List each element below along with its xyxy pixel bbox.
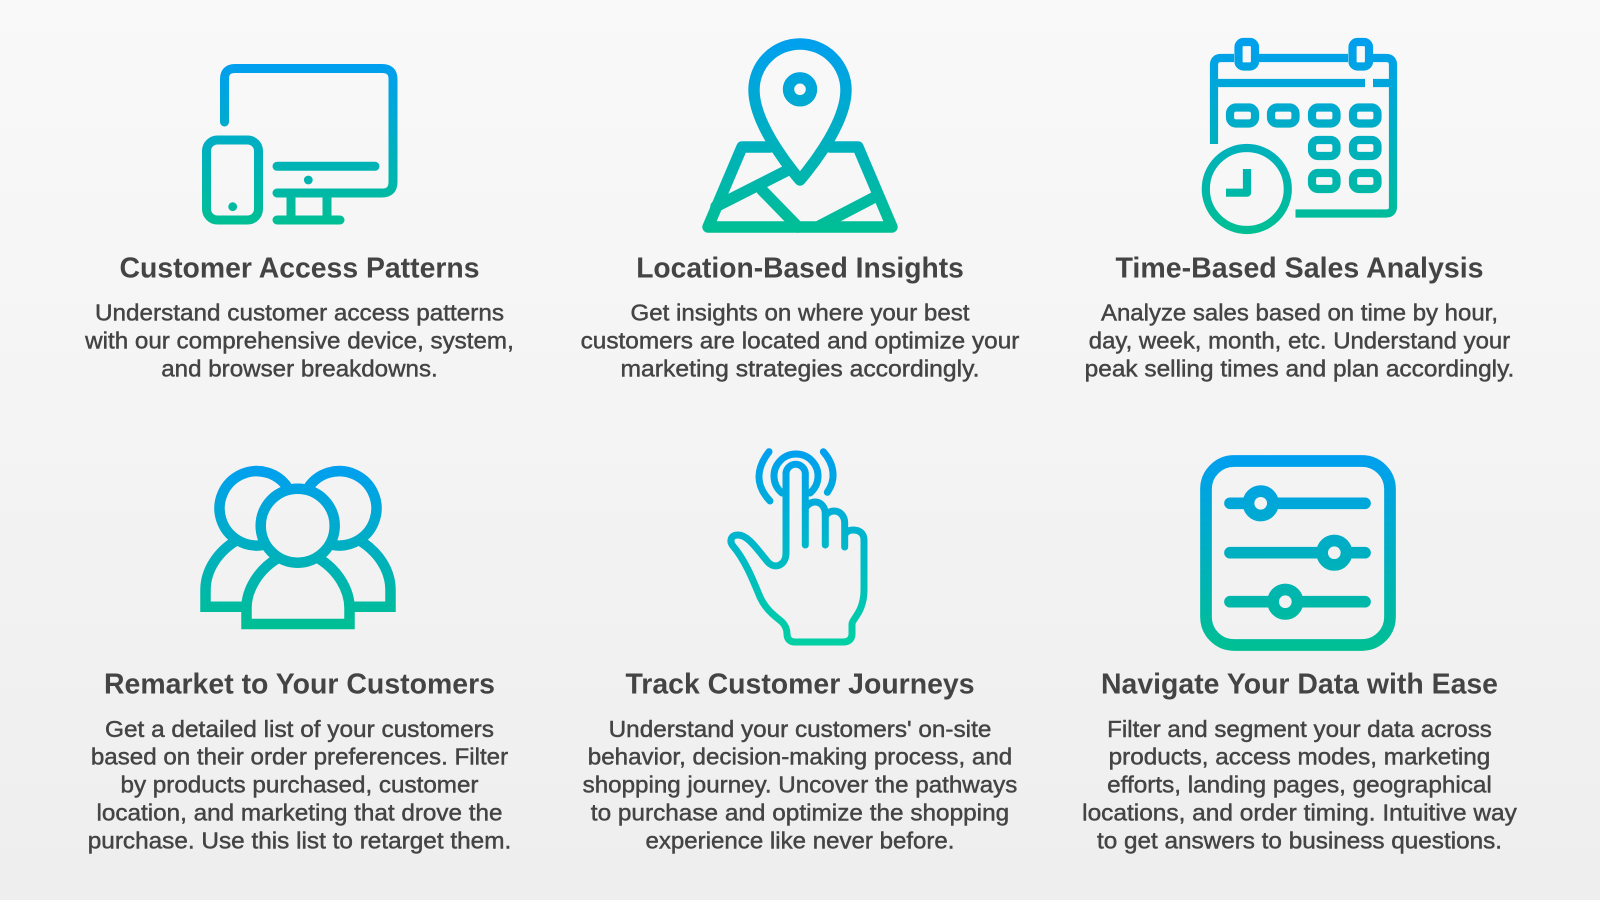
text block: Understand customer access patterns [95,300,504,326]
text block: Get a detailed list of your customers [105,716,494,742]
text block [88,716,511,853]
text block: shopping journey. Uncover the pathways [583,772,1017,798]
panel: remarket to your customers [88,471,511,853]
text block: with our comprehensive device, system, [84,328,514,354]
icon: group of people [206,471,390,624]
text block: to purchase and optimize the shopping [591,800,1009,826]
text block: efforts, landing pages, geographical [1107,772,1492,798]
text block: Get insights on where your best [630,300,970,326]
text block: purchase. Use this list to retarget them. [88,827,511,853]
heading: Time-Based Sales Analysis [1116,252,1484,284]
icon: calendar with clock [1206,42,1393,230]
text block [581,300,1020,381]
text block: based on their order preferences. Filter [91,744,508,770]
text block: products, access modes, marketing [1109,744,1490,770]
text block: customers are located and optimize your [581,328,1020,354]
heading: Navigate Your Data with Ease [1101,668,1498,700]
icon: sliders [1206,461,1390,645]
text block: Filter and segment your data across [1107,716,1492,742]
heading: Track Customer Journeys [626,668,974,700]
text block [84,300,514,381]
text block: by products purchased, customer [120,772,479,798]
text block: experience like never before. [646,827,954,853]
text block [1082,716,1517,853]
heading: Remarket to Your Customers [104,668,495,700]
text block: Understand your customers' on-site [609,716,991,742]
heading: Location-Based Insights [636,252,964,284]
text block: location, and marketing that drove the [96,800,502,826]
heading: Customer Access Patterns [120,252,480,284]
panel: navigate your data with ease [1082,461,1517,853]
text block: locations, and order timing. Intuitive way [1082,800,1517,826]
panel: time-based sales analysis [1085,42,1514,381]
text block: day, week, month, etc. Understand your [1089,328,1510,354]
panel: location-based insights [581,44,1020,381]
icon: tapping hand [731,452,864,642]
text block: behavior, decision-making process, and [588,744,1012,770]
text block: peak selling times and plan accordingly. [1085,355,1514,381]
text block: marketing strategies accordingly. [620,355,980,381]
text block [583,716,1017,853]
text block: and browser breakdowns. [161,355,438,381]
panel: customer access patterns [84,68,514,381]
text block: to get answers to business questions. [1097,827,1502,853]
icon: monitor and phone [206,68,393,220]
panel: track customer journeys [583,452,1017,853]
icon: map pin on map [708,44,892,227]
text block [1085,300,1514,381]
text block: Analyze sales based on time by hour, [1101,300,1498,326]
